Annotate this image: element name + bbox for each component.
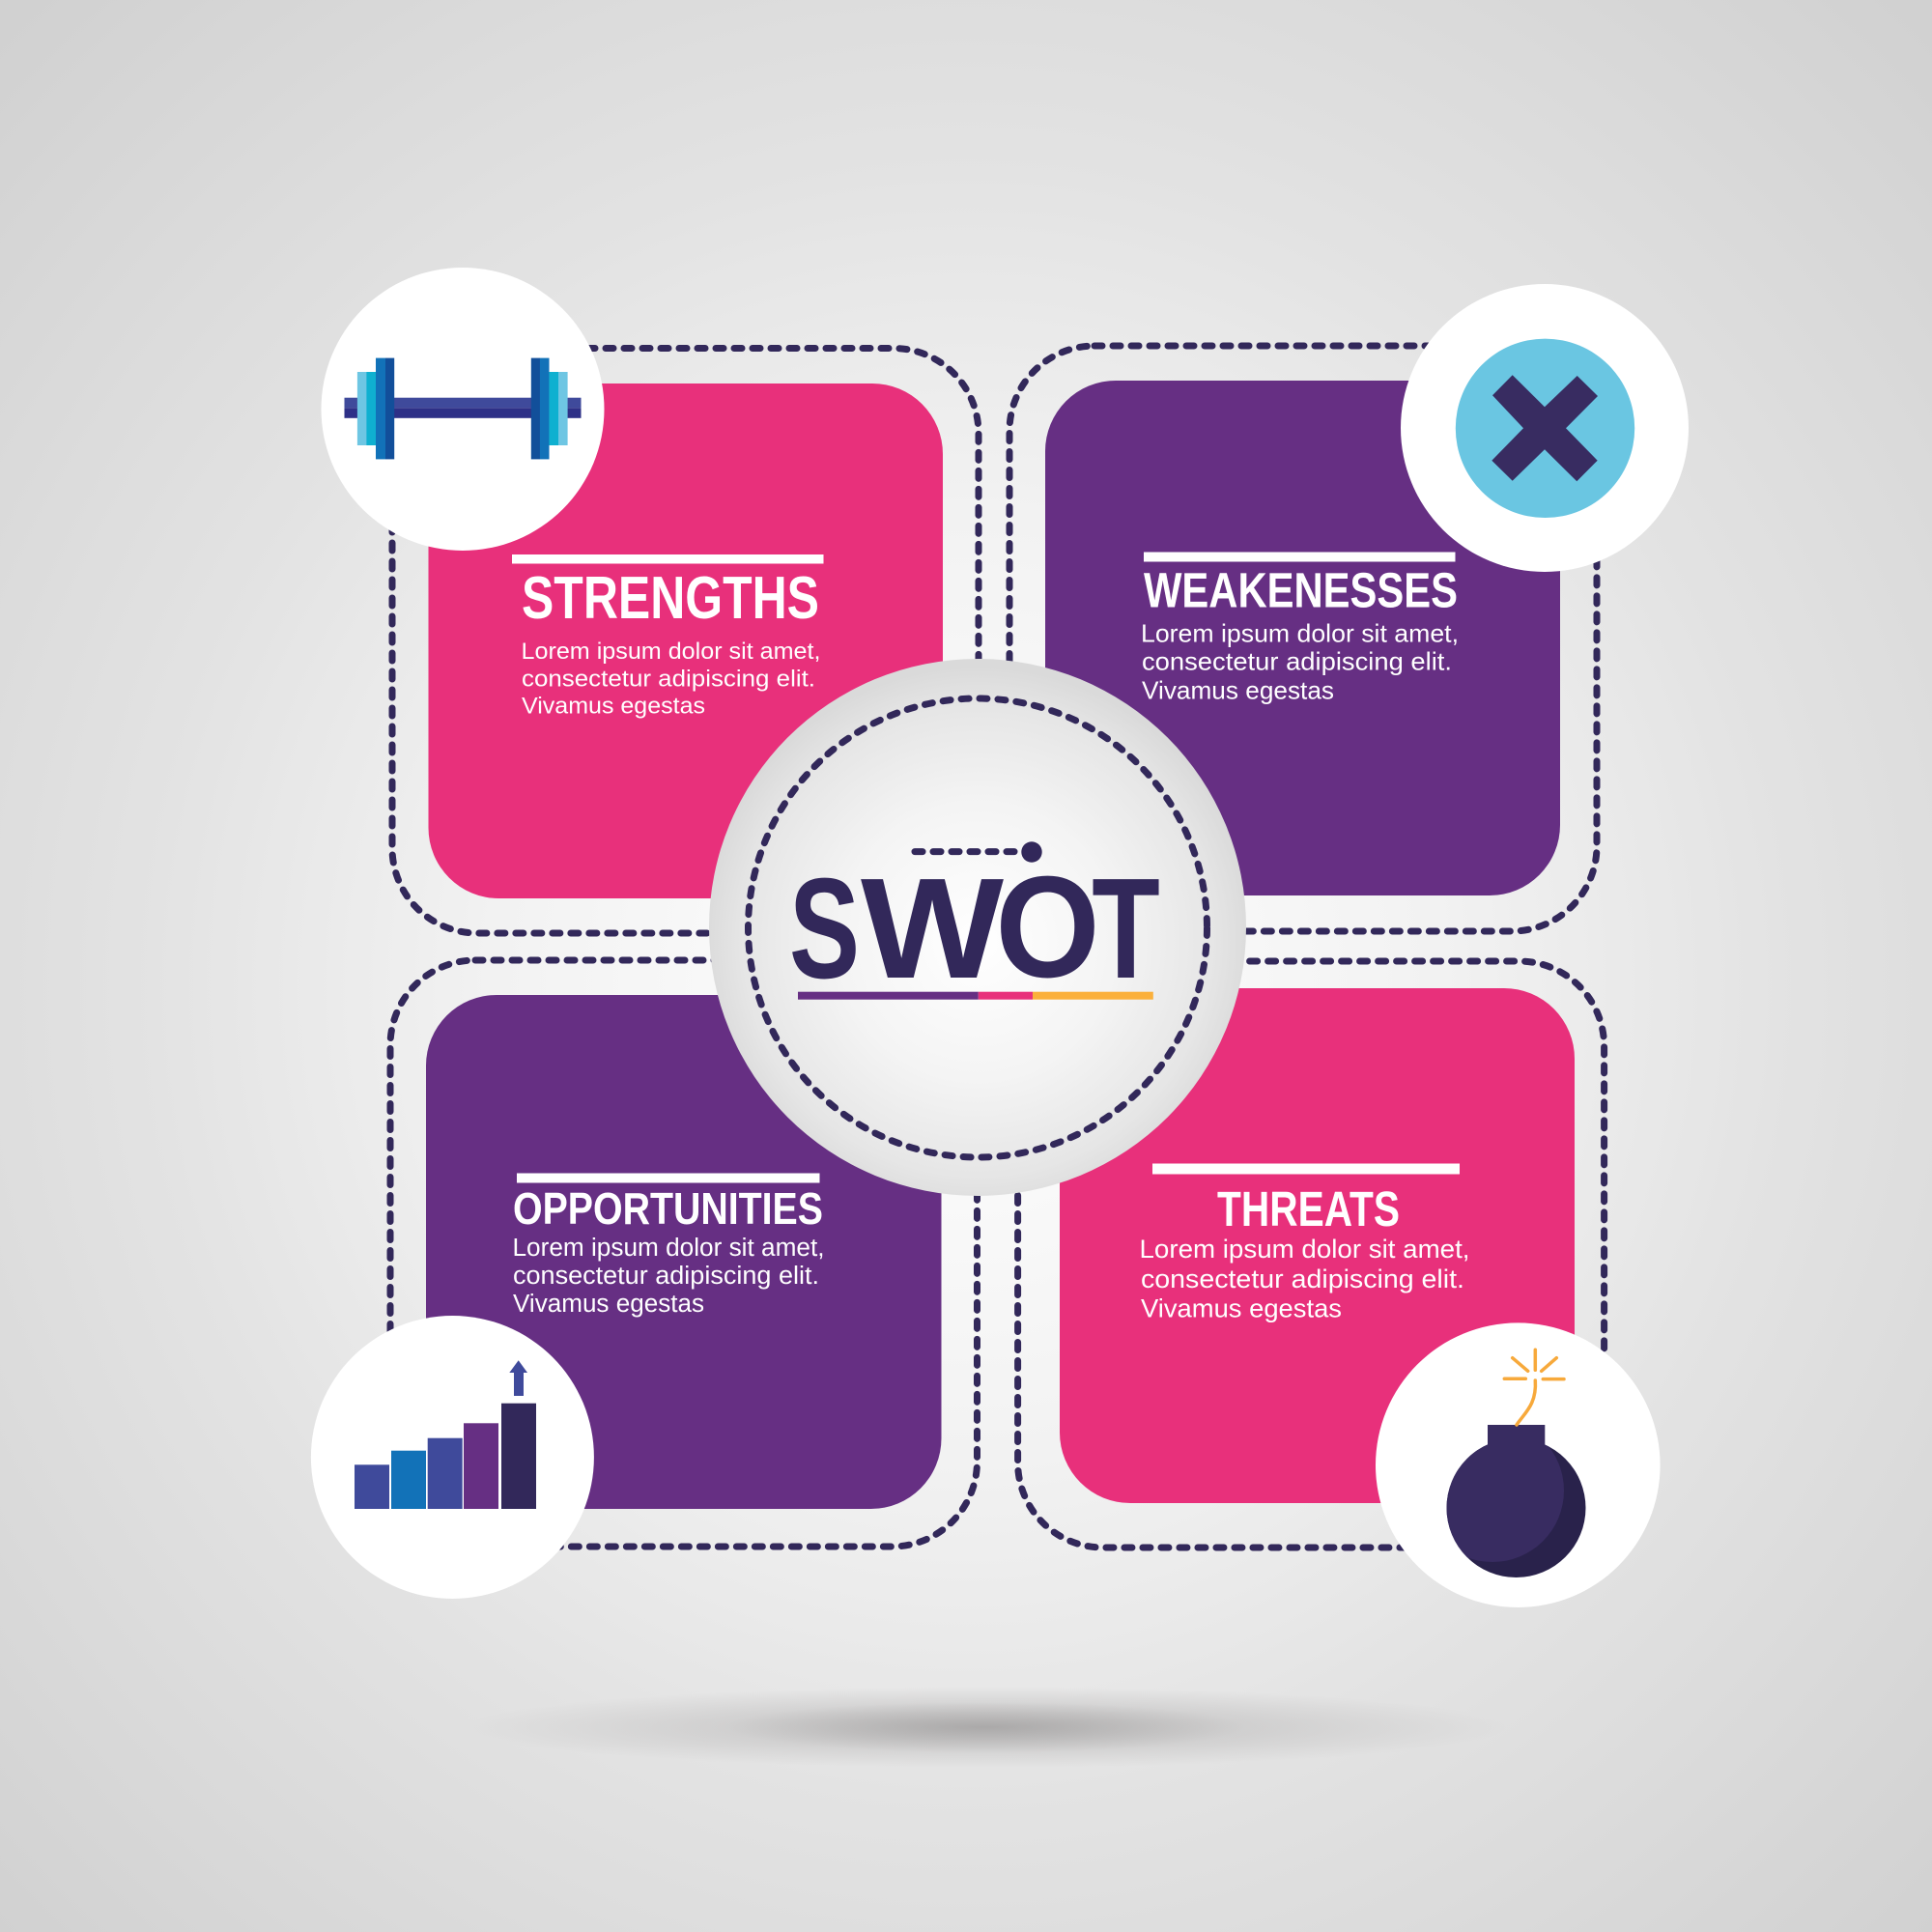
body text: weakenesses: Vivamus egestas (1142, 676, 1334, 705)
heading: threats: THREATS (1217, 1181, 1400, 1236)
icon badge: cross (1401, 284, 1689, 572)
body text: opportunities (512, 1235, 825, 1318)
body text: opportunities: Lorem ipsum dolor sit amet, (512, 1235, 825, 1262)
body text: threats: consectetur adipiscing elit. (1141, 1264, 1464, 1293)
body text: threats (1140, 1235, 1470, 1323)
center disc (709, 659, 1246, 1196)
arrow: upward (509, 1360, 527, 1396)
tricolor underline (798, 992, 1153, 1000)
heading rule: opportunities (517, 1173, 819, 1182)
panel: opportunities (390, 960, 978, 1547)
icon: blue circle with X (1456, 339, 1634, 518)
heading rule: weakenesses (1144, 553, 1455, 562)
heading: strengths: STRENGTHS (522, 565, 819, 632)
dashed outline: strengths (392, 348, 979, 933)
body text: opportunities: consectetur adipiscing elit. (513, 1263, 819, 1290)
body text: strengths: Vivamus egestas (522, 694, 705, 719)
badge disc: barbell (321, 268, 605, 551)
icon: bomb (1447, 1349, 1586, 1577)
title: SWOT: T (1092, 849, 1160, 1009)
badge disc: cross (1401, 284, 1689, 572)
body text: threats: Lorem ipsum dolor sit amet, (1140, 1235, 1470, 1264)
center dashed ring (748, 698, 1208, 1157)
heading: opportunities: OPPORTUNITIES (513, 1183, 823, 1234)
heading rule: strengths (512, 554, 823, 564)
heading: weakenesses: WEAKENESSES (1144, 562, 1458, 618)
title: SWOT (789, 845, 1160, 1009)
body text: strengths (522, 639, 821, 719)
body text: weakenesses: Lorem ipsum dolor sit amet, (1141, 618, 1459, 647)
dashed outline: threats (1018, 961, 1605, 1548)
body text: threats: Vivamus egestas (1141, 1294, 1342, 1323)
icon: barbell (344, 358, 582, 459)
badge disc: bomb (1376, 1322, 1661, 1607)
body text: strengths: consectetur adipiscing elit. (522, 667, 815, 692)
ground shadow (464, 1687, 1507, 1768)
panel: strengths (392, 348, 979, 933)
body text: strengths: Lorem ipsum dolor sit amet, (522, 639, 821, 665)
title: SWOT: O (995, 845, 1100, 1008)
title: SWOT: W (861, 849, 1004, 1009)
title marker: dashed line with dot (915, 841, 1042, 863)
panel: weakenesses (1009, 346, 1597, 931)
dashed outline: weakenesses (1009, 346, 1597, 931)
center SWOT badge (709, 659, 1246, 1196)
title: SWOT: S (789, 848, 860, 1009)
panel: threats (1018, 961, 1605, 1548)
badge disc: bar chart (311, 1316, 594, 1599)
card: threats (1060, 988, 1575, 1503)
dashed outline: opportunities (390, 960, 978, 1547)
body text: opportunities: Vivamus egestas (513, 1291, 704, 1318)
card: opportunities (426, 995, 941, 1509)
body text: weakenesses (1141, 618, 1459, 705)
icon: rising bar chart (355, 1360, 536, 1509)
card: strengths (429, 384, 943, 898)
card: weakenesses (1045, 381, 1560, 895)
heading rule: threats (1152, 1163, 1460, 1175)
icon badge: bomb (1376, 1322, 1661, 1607)
icon badge: barbell (321, 268, 605, 551)
icon badge: bar chart (311, 1316, 594, 1599)
body text: weakenesses: consectetur adipiscing elit. (1142, 647, 1452, 676)
